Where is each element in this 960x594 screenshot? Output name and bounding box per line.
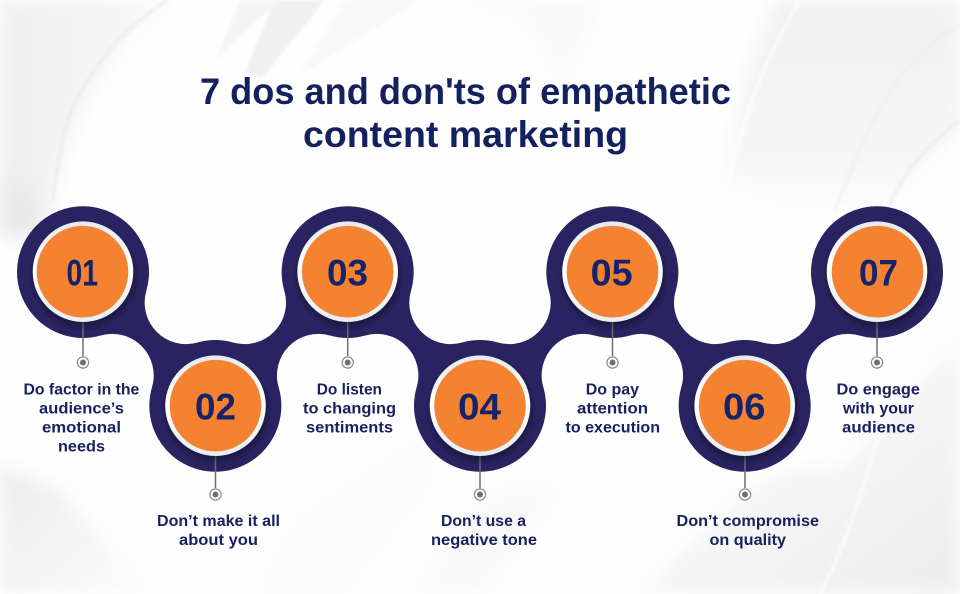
label 02: Don’t make it all [157, 513, 280, 530]
connector stem and dot 02 [210, 456, 221, 500]
winding navy chain connecting the seven steps [17, 206, 943, 472]
title [200, 71, 731, 155]
badge 02: 02 [195, 386, 236, 428]
label 02 [157, 513, 280, 549]
step 01 [24, 220, 140, 456]
badge 06: 06 [723, 386, 766, 428]
badge 03 [293, 220, 405, 332]
label 03: Do listen [317, 382, 382, 398]
label 07: Do engage [836, 382, 920, 398]
label 05: attention [577, 400, 648, 418]
step 03 [293, 220, 405, 436]
label 07: with your [842, 400, 914, 418]
label 01 [24, 382, 139, 456]
label 03 [303, 382, 396, 436]
label 03: to changing [303, 400, 396, 418]
badge 02 [160, 354, 272, 466]
label 01: needs [58, 438, 105, 456]
badge 05 [558, 220, 670, 332]
label 02: about you [179, 532, 258, 549]
connector stem and dot 07 [871, 322, 883, 368]
label 06: on quality [710, 532, 786, 549]
label 04: Don’t use a [441, 513, 526, 530]
badge 05: 05 [591, 252, 633, 294]
badge 01 [28, 220, 140, 332]
badge 06 [690, 354, 802, 466]
title: content marketing [303, 114, 628, 155]
badge 01: 01 [66, 252, 98, 294]
title: 7 dos and don'ts of empathetic [200, 71, 731, 112]
badge 03: 03 [327, 252, 368, 294]
label 07 [836, 382, 920, 436]
connector stem and dot 06 [739, 456, 751, 500]
badge 07: 07 [859, 252, 898, 294]
label 03: sentiments [306, 420, 393, 436]
label 05: to execution [566, 420, 660, 436]
label 07: audience [842, 420, 915, 436]
label 06 [676, 513, 819, 549]
step 02 [157, 354, 280, 549]
connector stem and dot 05 [607, 322, 618, 368]
label 04: negative tone [431, 532, 537, 549]
label 05 [566, 382, 660, 436]
badge 04 [425, 354, 537, 466]
label 06: Don’t compromise [676, 513, 819, 530]
connector stem and dot 01 [77, 322, 89, 368]
label 01: audience’s [39, 400, 124, 418]
badge 04: 04 [458, 386, 501, 428]
step 05 [558, 220, 670, 436]
badge 07 [822, 220, 934, 332]
label 05: Do pay [586, 382, 639, 398]
step 04 [425, 354, 537, 549]
connector stem and dot 04 [474, 456, 486, 500]
step 07 [822, 220, 934, 436]
label 04 [431, 513, 537, 549]
connector stem and dot 03 [342, 322, 353, 368]
step 06 [676, 354, 819, 549]
label 01: Do factor in the [24, 382, 139, 398]
label 01: emotional [42, 420, 121, 436]
